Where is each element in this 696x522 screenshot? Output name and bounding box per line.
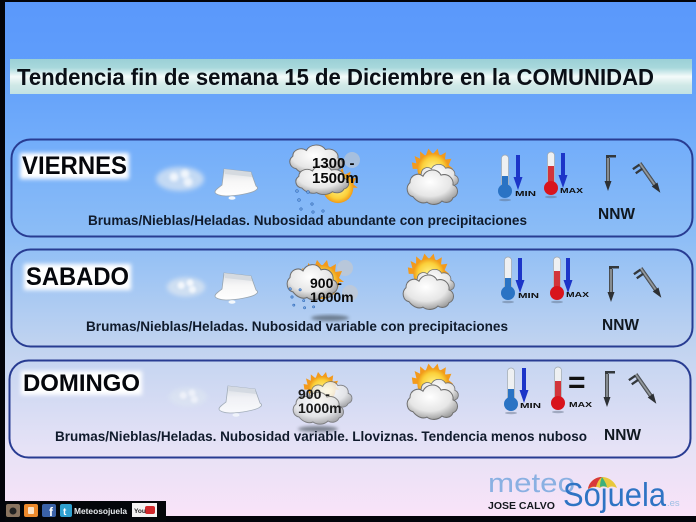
icon: wind arrows bbox=[604, 371, 659, 409]
wind direction: NNW bbox=[604, 427, 641, 444]
icon: facebook bbox=[42, 504, 56, 519]
icon: youtube: You bbox=[134, 508, 146, 515]
title banner: Tendencia fin de semana 15 de Diciembre en la COMUNIDAD bbox=[17, 64, 654, 90]
icon: twitter bbox=[60, 504, 72, 518]
icon: facebook: f bbox=[49, 505, 54, 519]
panel outline bbox=[12, 250, 692, 346]
panel: sabado bbox=[12, 250, 692, 346]
icon: thermometer max bbox=[550, 257, 589, 303]
forecast text: Brumas/Nieblas/Heladas. Nubosidad abundante con precipitaciones bbox=[88, 212, 527, 228]
icon: cloud with sun and snow level bbox=[293, 372, 352, 432]
social handle: Meteosojuela bbox=[74, 506, 127, 516]
panel: domingo bbox=[10, 360, 690, 458]
panel: viernes bbox=[12, 140, 692, 236]
icon: fog bbox=[167, 277, 205, 297]
panel outline bbox=[12, 140, 692, 236]
forecast text: Brumas/Nieblas/Heladas. Nubosidad variable. Lloviznas. Tendencia menos nuboso bbox=[55, 428, 587, 444]
day label: SABADO bbox=[26, 263, 129, 291]
icon: thermometer min bbox=[504, 368, 541, 414]
icon: thermometer min: MIN bbox=[520, 401, 541, 410]
social media bar bbox=[5, 501, 166, 522]
icon: youtube bbox=[132, 503, 157, 517]
icon: cloud with sun and snow level: 900 - bbox=[298, 386, 330, 402]
icon: rain with sun and snow level bbox=[290, 145, 360, 213]
icon: thermometer min: MIN bbox=[518, 291, 539, 300]
icon: frost bbox=[219, 386, 262, 417]
day label: VIERNES bbox=[22, 152, 127, 180]
icon: thermometer max: = bbox=[568, 366, 586, 399]
icon: thermometer max bbox=[551, 366, 592, 413]
author: JOSE CALVO bbox=[488, 500, 555, 512]
icon: frost bbox=[215, 273, 258, 304]
icon: thermometer max: MAX bbox=[569, 400, 592, 409]
icon: cloud with sun and snow level: 1000m bbox=[298, 400, 342, 416]
icon: blogger bbox=[24, 504, 38, 517]
icon: thermometer min bbox=[498, 155, 536, 201]
icon: thermometer max bbox=[544, 152, 583, 198]
icon: wind arrows bbox=[604, 155, 663, 198]
icon: rain with sun and snow level: 1000m bbox=[310, 289, 354, 305]
icon: rain with sun and snow level: 1500m bbox=[312, 170, 359, 187]
icon: fog bbox=[169, 387, 207, 407]
icon: instagram bbox=[6, 504, 20, 517]
icon: thermometer min bbox=[501, 257, 539, 303]
icon: rain with sun and snow level: 1300 - bbox=[312, 155, 355, 172]
icon: rain with sun and snow level: 900 - bbox=[310, 275, 342, 291]
icon: twitter: t bbox=[63, 507, 67, 518]
wind direction: NNW bbox=[598, 206, 635, 223]
day label: DOMINGO bbox=[23, 370, 140, 397]
icon: wind arrows bbox=[608, 266, 664, 303]
forecast text: Brumas/Nieblas/Heladas. Nubosidad variable con precipitaciones bbox=[86, 318, 508, 334]
icon: umbrella bbox=[588, 477, 617, 489]
icon: partly cloudy bbox=[407, 149, 458, 204]
icon: thermometer max: MAX bbox=[560, 186, 583, 195]
icon: partly cloudy bbox=[403, 254, 454, 309]
wind direction: NNW bbox=[602, 317, 639, 334]
icon: frost bbox=[215, 169, 258, 200]
icon: rain with sun and snow level bbox=[287, 260, 358, 321]
logo: meteo sojuela bbox=[488, 468, 680, 513]
logo: meteo sojuela: Sojuela bbox=[563, 476, 667, 513]
logo: meteo sojuela: .es bbox=[667, 498, 680, 509]
panel outline bbox=[10, 360, 690, 458]
icon: thermometer min: MIN bbox=[515, 189, 536, 198]
icon: fog bbox=[156, 167, 204, 191]
icon: partly cloudy bbox=[407, 364, 458, 419]
icon: thermometer max: MAX bbox=[566, 290, 589, 299]
logo: meteo sojuela: meteo bbox=[488, 468, 575, 498]
